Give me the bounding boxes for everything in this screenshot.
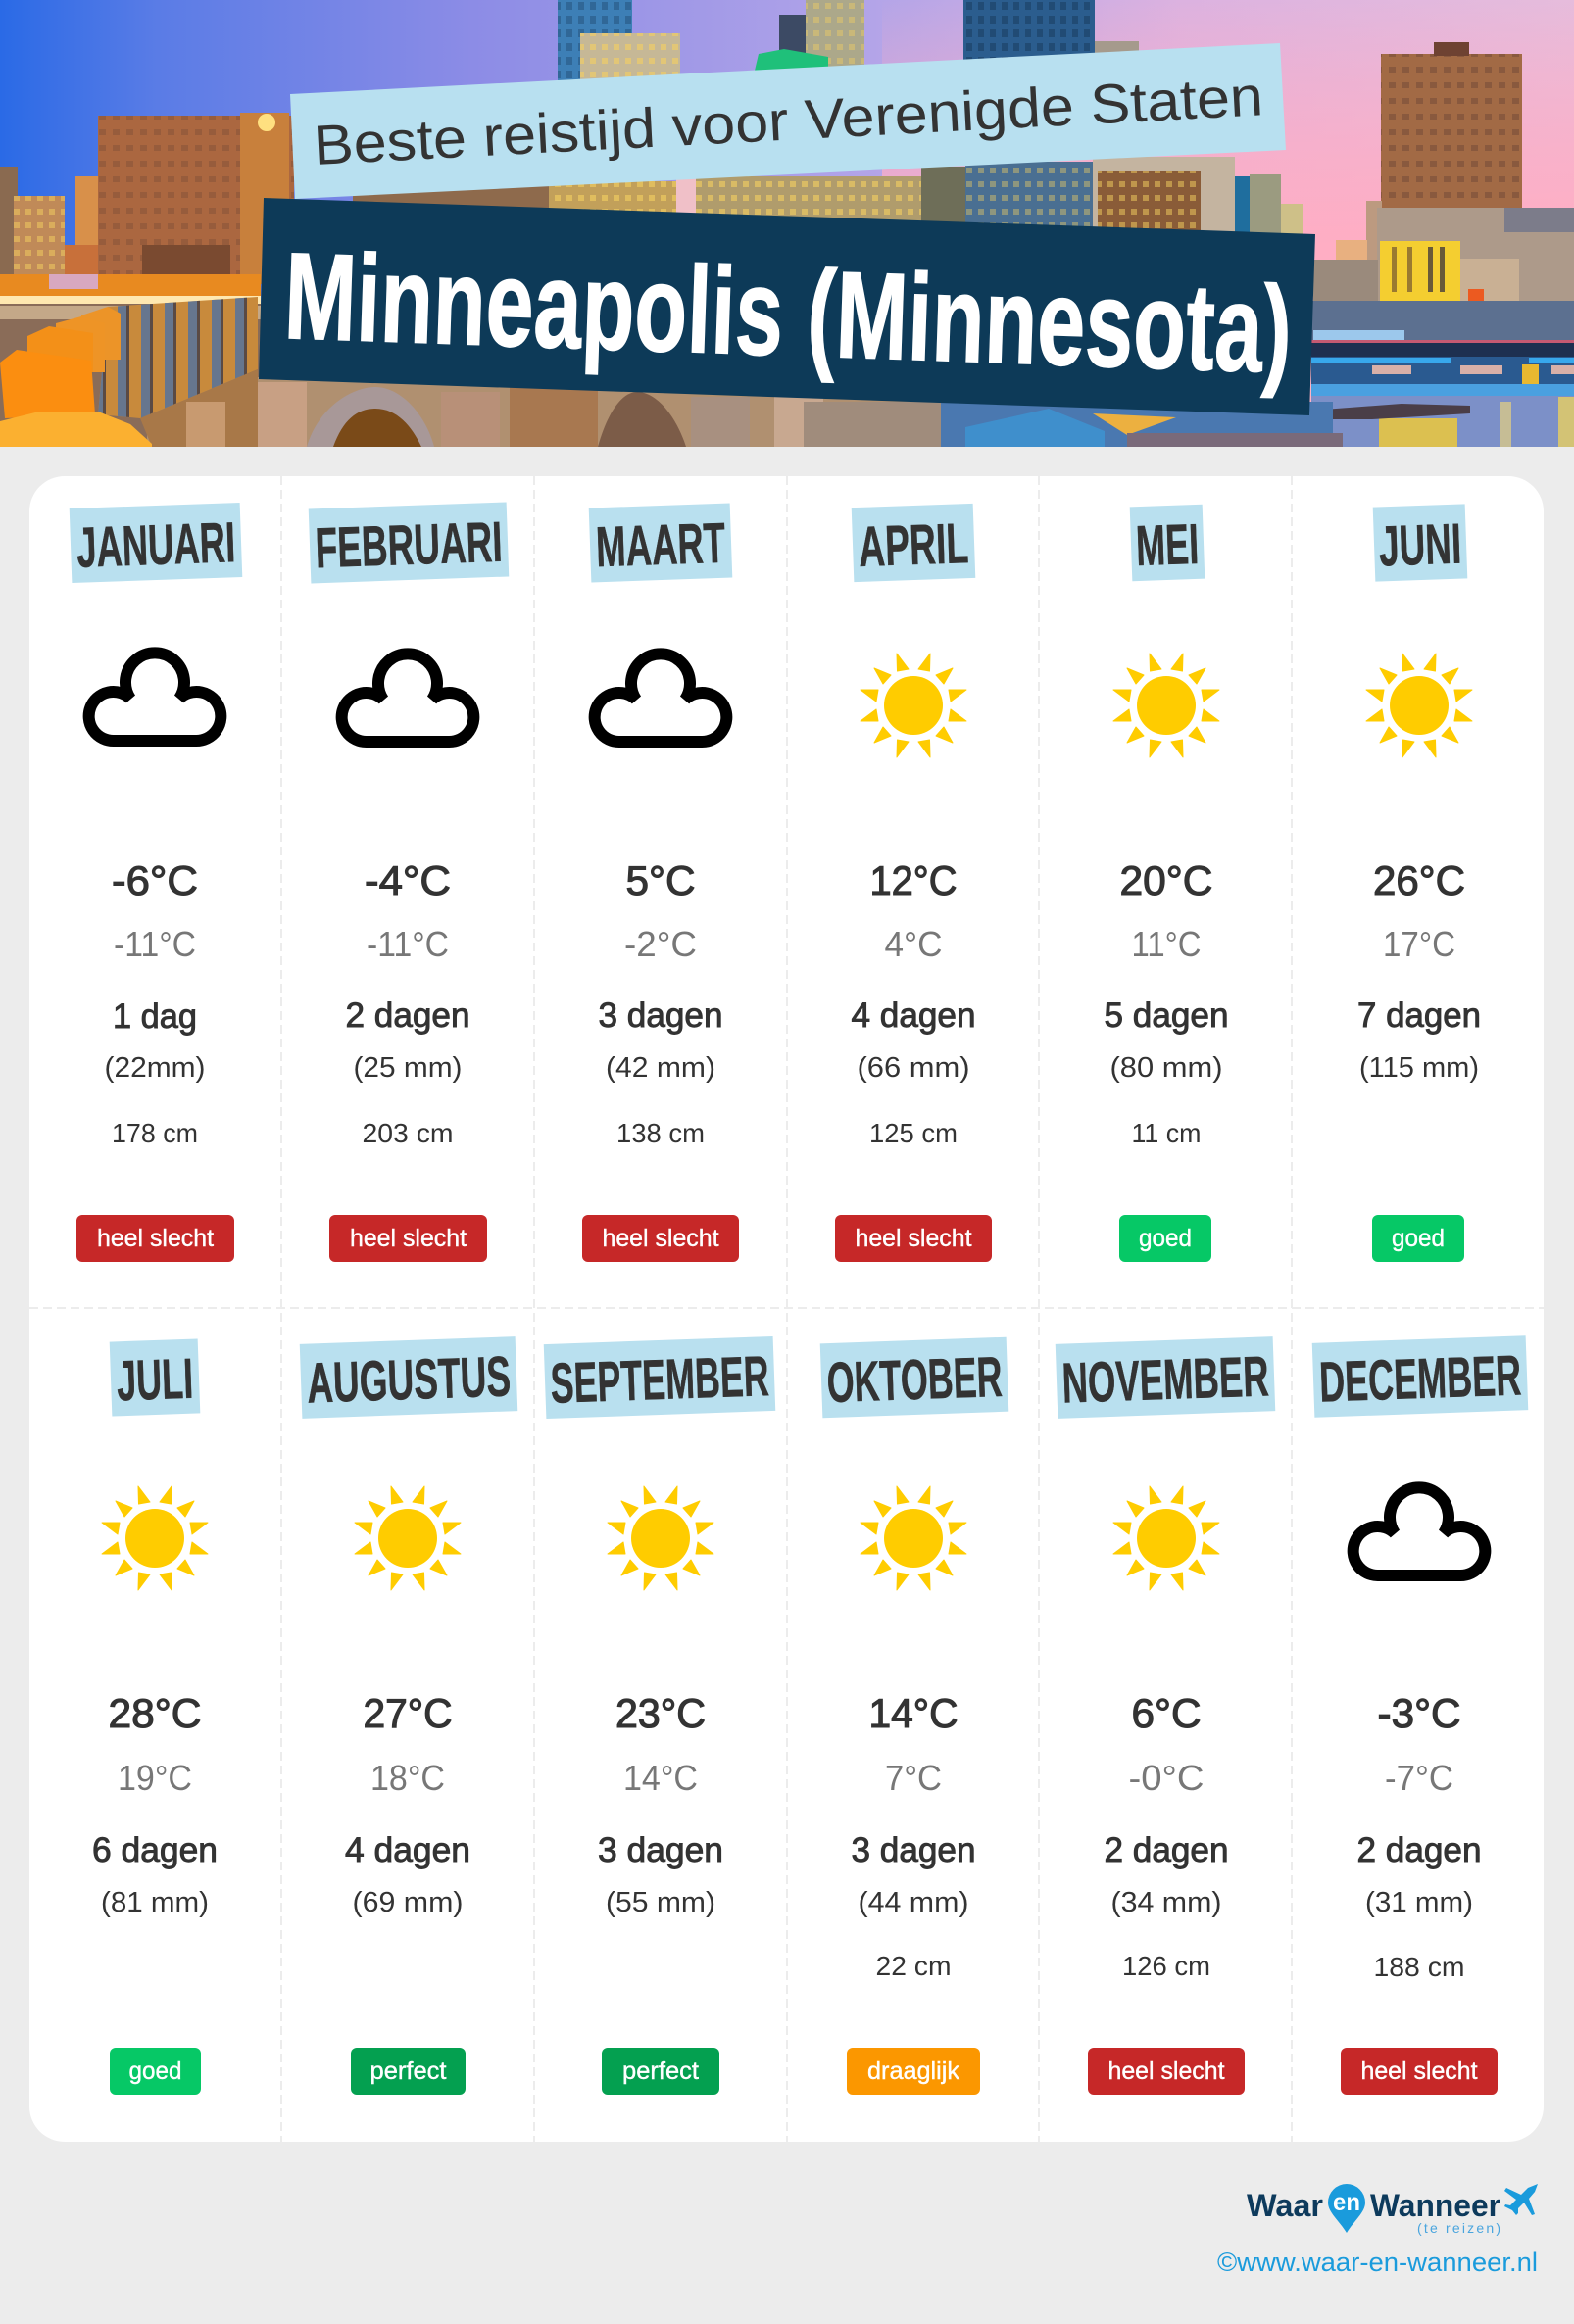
high temperature: 6°C bbox=[1131, 1690, 1202, 1736]
snowfall: 125 cm bbox=[869, 1118, 958, 1148]
rating badge bbox=[110, 2048, 201, 2095]
icon: sun bbox=[102, 1486, 208, 1590]
high temperature: 20°C bbox=[1119, 857, 1213, 903]
panel: april bbox=[835, 504, 992, 1262]
month heading: juli: JULI bbox=[116, 1347, 194, 1413]
snowfall: 178 cm bbox=[112, 1118, 198, 1148]
icon: cloud bbox=[342, 654, 473, 742]
rating badge: heel slecht bbox=[97, 1225, 214, 1252]
rainy days: 6 dagen bbox=[92, 1831, 218, 1869]
middle skyline band under the subtitle bbox=[353, 181, 676, 240]
high temperature: -6°C bbox=[112, 857, 198, 903]
banner photo: Minneapolis skyline bbox=[0, 0, 1574, 447]
panel: augustus bbox=[300, 1336, 517, 2095]
rating badge bbox=[76, 1215, 234, 1262]
rainfall: (55 mm) bbox=[606, 1887, 715, 1918]
icon: cloud bbox=[89, 653, 221, 741]
rainfall: (31 mm) bbox=[1365, 1887, 1473, 1918]
month heading: november bbox=[1056, 1336, 1275, 1419]
rainfall: (80 mm) bbox=[1109, 1052, 1223, 1084]
high temperature: -4°C bbox=[365, 857, 451, 903]
low temperature: -0°C bbox=[1129, 1758, 1204, 1798]
orange pillars bbox=[81, 307, 121, 360]
month heading: september bbox=[544, 1336, 775, 1419]
logo word: Wanneer: Wanneer bbox=[1370, 2188, 1500, 2223]
left brown tower bbox=[98, 116, 294, 284]
month heading: april: APRIL bbox=[858, 511, 969, 579]
rating badge bbox=[1088, 2048, 1245, 2095]
rating badge: heel slecht bbox=[602, 1225, 719, 1252]
month heading: mei bbox=[1130, 505, 1205, 581]
panel: mei bbox=[1104, 505, 1229, 1262]
panel: juli bbox=[92, 1338, 218, 2095]
rainy days: 4 dagen bbox=[851, 996, 976, 1035]
month heading: maart bbox=[589, 504, 732, 582]
rating badge: goed bbox=[1392, 1225, 1445, 1252]
icon: map pin bbox=[1328, 2184, 1365, 2233]
low temperature: -11°C bbox=[114, 924, 196, 964]
subtitle band bbox=[290, 43, 1286, 199]
low temperature: 14°C bbox=[623, 1758, 698, 1798]
rating badge bbox=[329, 1215, 487, 1262]
rating badge: heel slecht bbox=[855, 1225, 972, 1252]
month heading: mei: MEI bbox=[1135, 512, 1200, 578]
rainy days: 3 dagen bbox=[598, 996, 723, 1035]
month heading: februari bbox=[309, 502, 509, 584]
rainfall: (42 mm) bbox=[606, 1052, 715, 1084]
high temperature: 27°C bbox=[363, 1690, 453, 1736]
icon: sun bbox=[355, 1486, 461, 1590]
centre towers top bbox=[558, 0, 632, 88]
icon: sun bbox=[1113, 1486, 1219, 1590]
month heading: januari bbox=[70, 503, 242, 583]
rainfall: (69 mm) bbox=[353, 1887, 463, 1918]
rainy days: 3 dagen bbox=[598, 1831, 723, 1869]
rainy days: 2 dagen bbox=[345, 996, 470, 1035]
rainy days: 3 dagen bbox=[851, 1831, 976, 1869]
icon: airplane bbox=[1504, 2184, 1538, 2215]
logo tagline: (te reizen) bbox=[1417, 2220, 1500, 2236]
rainfall: (81 mm) bbox=[101, 1887, 209, 1918]
far left buildings bbox=[0, 167, 18, 284]
icon: cloud bbox=[1353, 1487, 1485, 1575]
rainy days: 2 dagen bbox=[1104, 1831, 1229, 1869]
high temperature: 14°C bbox=[868, 1690, 959, 1736]
panel: juni bbox=[1357, 504, 1481, 1262]
low temperature: 4°C bbox=[884, 924, 943, 964]
logo: Waar en Wanneer bbox=[1247, 2184, 1538, 2236]
rating badge bbox=[1119, 1215, 1211, 1262]
icon: sun bbox=[1113, 654, 1219, 757]
logo word: Waar: Waar bbox=[1247, 2188, 1323, 2223]
rainfall: (115 mm) bbox=[1359, 1052, 1479, 1084]
high temperature: 12°C bbox=[870, 857, 957, 903]
month heading: september: SEPTEMBER bbox=[550, 1344, 770, 1416]
icon: sun bbox=[861, 654, 966, 757]
low temperature: 17°C bbox=[1383, 924, 1455, 964]
rating badge bbox=[351, 2048, 466, 2095]
high temperature: 26°C bbox=[1373, 857, 1465, 903]
rainy days: 5 dagen bbox=[1104, 996, 1229, 1035]
river under title bbox=[941, 402, 1333, 447]
month heading: oktober: OKTOBER bbox=[826, 1345, 1004, 1415]
rating badge: goed bbox=[129, 2058, 182, 2085]
rainfall: (34 mm) bbox=[1111, 1887, 1221, 1918]
rainfall: (66 mm) bbox=[857, 1052, 970, 1084]
icon: sun bbox=[1366, 654, 1472, 757]
month heading: juli bbox=[110, 1338, 200, 1417]
snowfall: 126 cm bbox=[1122, 1951, 1210, 1981]
snowfall: 203 cm bbox=[363, 1118, 453, 1148]
right stone buildings bbox=[1366, 201, 1382, 309]
rating badge bbox=[582, 1215, 739, 1262]
rainy days: 4 dagen bbox=[345, 1831, 470, 1869]
bridge bbox=[0, 304, 261, 447]
rainfall: (22mm) bbox=[104, 1052, 206, 1084]
rating badge: heel slecht bbox=[350, 1225, 467, 1252]
high temperature: 28°C bbox=[108, 1690, 202, 1736]
icon: sun bbox=[608, 1486, 713, 1590]
panel: oktober bbox=[820, 1337, 1008, 2095]
rating badge: perfect bbox=[370, 2058, 447, 2085]
icon: cloud bbox=[595, 654, 726, 742]
high temperature: -3°C bbox=[1378, 1690, 1460, 1736]
month heading: januari: JANUARI bbox=[75, 510, 236, 580]
logo word: en: en bbox=[1333, 2189, 1360, 2216]
road light band bbox=[0, 274, 261, 296]
snowfall: 138 cm bbox=[616, 1118, 705, 1148]
month heading: maart: MAART bbox=[595, 511, 726, 579]
rainy days: 1 dag bbox=[113, 997, 197, 1036]
rainfall: (25 mm) bbox=[353, 1052, 463, 1084]
rainy days: 7 dagen bbox=[1357, 996, 1481, 1035]
low temperature: 7°C bbox=[885, 1758, 942, 1798]
month heading: juni: JUNI bbox=[1378, 512, 1462, 578]
low temperature: -2°C bbox=[624, 924, 697, 964]
rating badge bbox=[1341, 2048, 1498, 2095]
panel: januari bbox=[70, 503, 242, 1262]
low temperature: 18°C bbox=[370, 1758, 445, 1798]
rainy days: 2 dagen bbox=[1356, 1831, 1482, 1869]
rating badge: draaglijk bbox=[867, 2058, 959, 2085]
rating badge: perfect bbox=[622, 2058, 699, 2085]
right brown tower bbox=[1381, 54, 1522, 230]
low temperature: 19°C bbox=[118, 1758, 192, 1798]
month heading: augustus bbox=[300, 1336, 517, 1419]
rating badge bbox=[847, 2048, 980, 2095]
month heading: oktober bbox=[820, 1337, 1008, 1418]
panel: februari bbox=[309, 502, 509, 1262]
low temperature: -7°C bbox=[1385, 1758, 1453, 1798]
rating badge: heel slecht bbox=[1107, 2058, 1225, 2085]
month heading: februari: FEBRUARI bbox=[315, 510, 504, 580]
snowfall: 11 cm bbox=[1131, 1118, 1202, 1148]
panel: maart bbox=[582, 504, 739, 1262]
month heading: april bbox=[852, 504, 975, 582]
panel: december bbox=[1312, 1335, 1528, 2095]
rating badge: goed bbox=[1139, 1225, 1192, 1252]
high temperature: 5°C bbox=[625, 857, 696, 903]
rating badge bbox=[602, 2048, 719, 2095]
icon: sun bbox=[861, 1486, 966, 1590]
rating badge bbox=[1372, 1215, 1464, 1262]
website credit: ©www.waar-en-wanneer.nl bbox=[1217, 2248, 1538, 2277]
high temperature: 23°C bbox=[615, 1690, 706, 1736]
stone base and river bbox=[1311, 301, 1574, 343]
rating badge: heel slecht bbox=[1360, 2058, 1478, 2085]
month heading: augustus: AUGUSTUS bbox=[306, 1344, 512, 1416]
snowfall: 22 cm bbox=[876, 1951, 951, 1981]
rainfall: (44 mm) bbox=[859, 1887, 968, 1918]
subtitle text: Beste reistijd voor Verenigde Staten bbox=[312, 65, 1264, 177]
month heading: juni bbox=[1373, 504, 1467, 582]
panel: september bbox=[544, 1336, 775, 2095]
month heading: november: NOVEMBER bbox=[1061, 1344, 1270, 1416]
low temperature: 11°C bbox=[1131, 924, 1202, 964]
title band bbox=[259, 198, 1315, 415]
rating badge bbox=[835, 1215, 992, 1262]
panel: months card bbox=[29, 476, 1544, 2142]
panel: november bbox=[1056, 1336, 1275, 2095]
low temperature: -11°C bbox=[367, 924, 449, 964]
snowfall: 188 cm bbox=[1374, 1952, 1464, 1982]
